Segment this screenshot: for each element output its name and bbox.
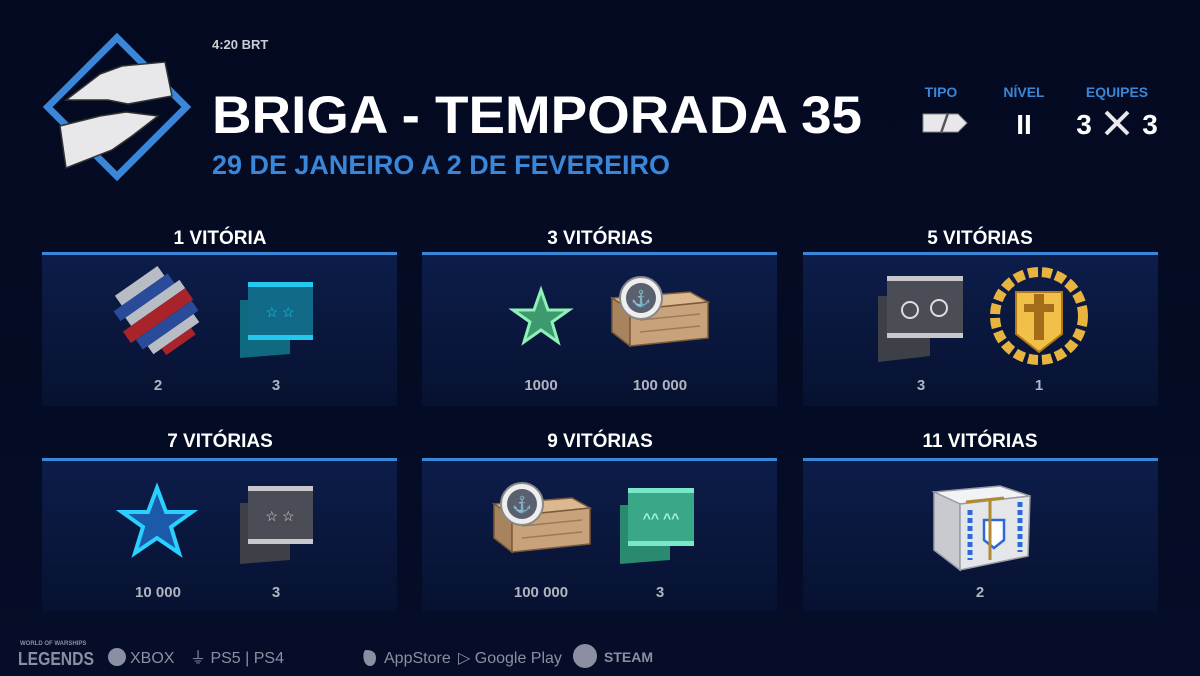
panel: 3 vitorias: 1000 [524, 377, 558, 394]
title: BRIGA - TEMPORADA 35 [212, 86, 862, 145]
panel: 7 vitorias: 10 000 [135, 584, 181, 601]
icon: flag two stars: ☆ ☆ [266, 304, 294, 320]
info: nivel: NÍVEL [1003, 84, 1045, 100]
panel: 5 vitorias: 5 VITÓRIAS [927, 227, 1033, 249]
icon: camouflage [103, 260, 210, 368]
time: 4:20 BRT [212, 37, 268, 52]
panel: 1 vitoria [42, 227, 397, 406]
footer: platform logos: ▷ Google Play [458, 650, 562, 667]
panel: 1 vitoria: 3 [272, 377, 280, 394]
panel: 5 vitorias: 1 [1035, 377, 1043, 394]
info: equipes: EQUIPES [1086, 84, 1148, 100]
icon: brawl logo fists [48, 38, 186, 176]
date subtitle: 29 DE JANEIRO A 2 DE FEVEREIRO [212, 150, 670, 180]
info: tipo [923, 84, 967, 133]
panel: 9 vitorias: 9 VITÓRIAS [547, 430, 653, 452]
info: nivel [1003, 84, 1045, 140]
footer: platform logos: LEGENDS [18, 649, 94, 669]
footer: platform logos: WORLD OF WARSHIPS [20, 641, 86, 647]
footer: platform logos [18, 641, 653, 669]
icon: white container [934, 486, 1030, 570]
panel: 11 vitorias [803, 430, 1158, 611]
icon: grey flag stars [240, 486, 313, 564]
footer: platform logos: STEAM [604, 649, 653, 665]
panel: 1 vitoria: 1 VITÓRIA [174, 227, 267, 249]
icon: green flag chevrons [620, 488, 694, 564]
footer: platform logos: ⏚ PS5 | PS4 [190, 649, 284, 667]
panel: 11 vitorias: 2 [976, 584, 984, 601]
icon: flag grey credits [878, 276, 963, 362]
panel: 11 vitorias: 11 VITÓRIAS [922, 430, 1038, 452]
icon: green star [513, 290, 569, 342]
panel: 3 vitorias [422, 227, 777, 406]
icon: flag two stars [240, 282, 313, 358]
panel: 3 vitorias: 3 VITÓRIAS [547, 227, 653, 249]
info: equipes [1076, 84, 1158, 140]
panel: 1 vitoria: 2 [154, 377, 162, 394]
icon: crate credits [494, 483, 590, 552]
panel: 9 vitorias [422, 430, 777, 611]
panel: 5 vitorias: 3 [917, 377, 925, 394]
icon: green flag chevrons: ^^ ^^ [643, 510, 679, 526]
panel: 9 vitorias: 3 [656, 584, 664, 601]
panel: 5 vitorias [803, 227, 1158, 406]
footer: platform logos: AppStore [384, 650, 451, 667]
panel: 7 vitorias [42, 430, 397, 611]
info: nivel: II [1016, 109, 1032, 140]
icon: blue star [122, 488, 192, 553]
icon: crate with credits [612, 277, 708, 346]
panel: 9 vitorias: 100 000 [514, 584, 568, 601]
icon: gold laurel emblem [995, 272, 1083, 360]
panel: 7 vitorias: 7 VITÓRIAS [167, 430, 273, 452]
panel: 7 vitorias: 3 [272, 584, 280, 601]
info: equipes: 3 [1142, 109, 1158, 140]
panel: 3 vitorias: 100 000 [633, 377, 687, 394]
icon: grey flag stars: ☆ ☆ [266, 508, 294, 524]
icon: crate credits: ⚓ [512, 495, 532, 514]
footer: platform logos: XBOX [130, 650, 175, 667]
info: equipes: 3 [1076, 109, 1092, 140]
info: tipo: TIPO [925, 84, 957, 100]
icon: crate with credits: ⚓ [631, 289, 651, 308]
